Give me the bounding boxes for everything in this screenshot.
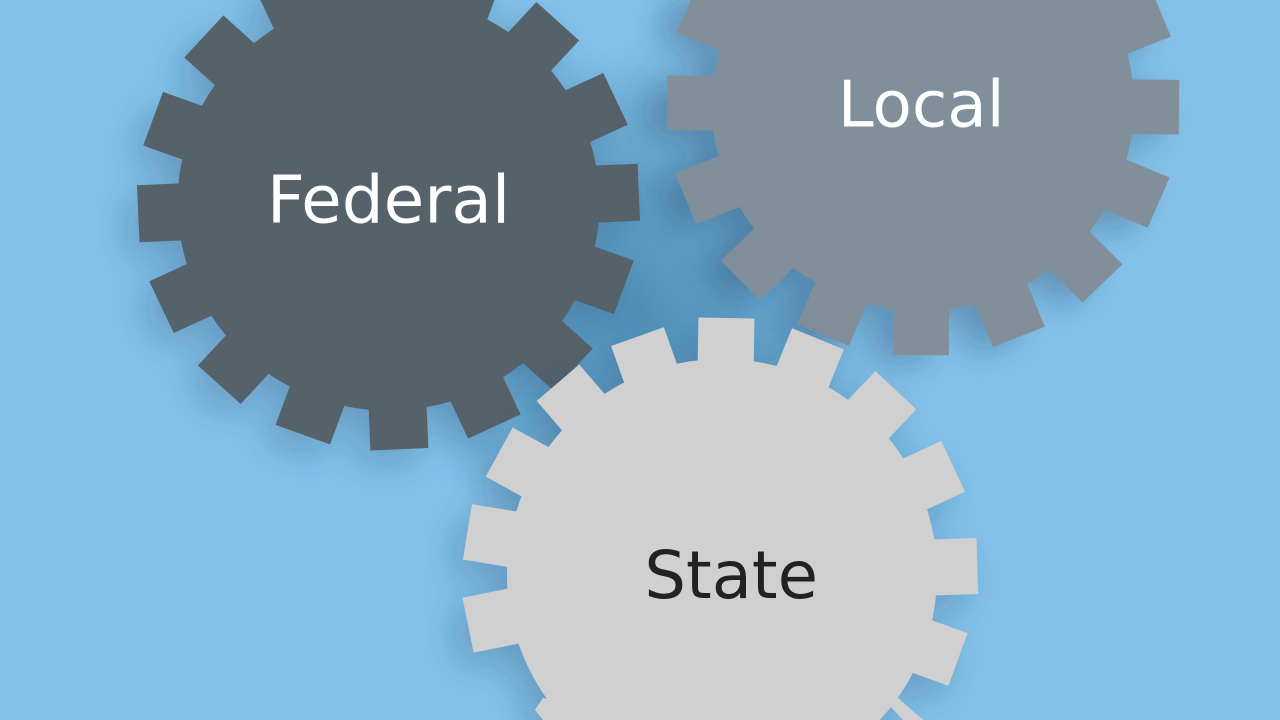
label: Local: Local [838, 68, 1005, 143]
label: State: State [644, 538, 818, 614]
gear: Local [665, 0, 1181, 357]
gear: Federal [127, 0, 650, 460]
label: Federal: Federal [267, 162, 510, 239]
gear: State [463, 318, 978, 720]
shaded area between the gears [400, 40, 880, 580]
